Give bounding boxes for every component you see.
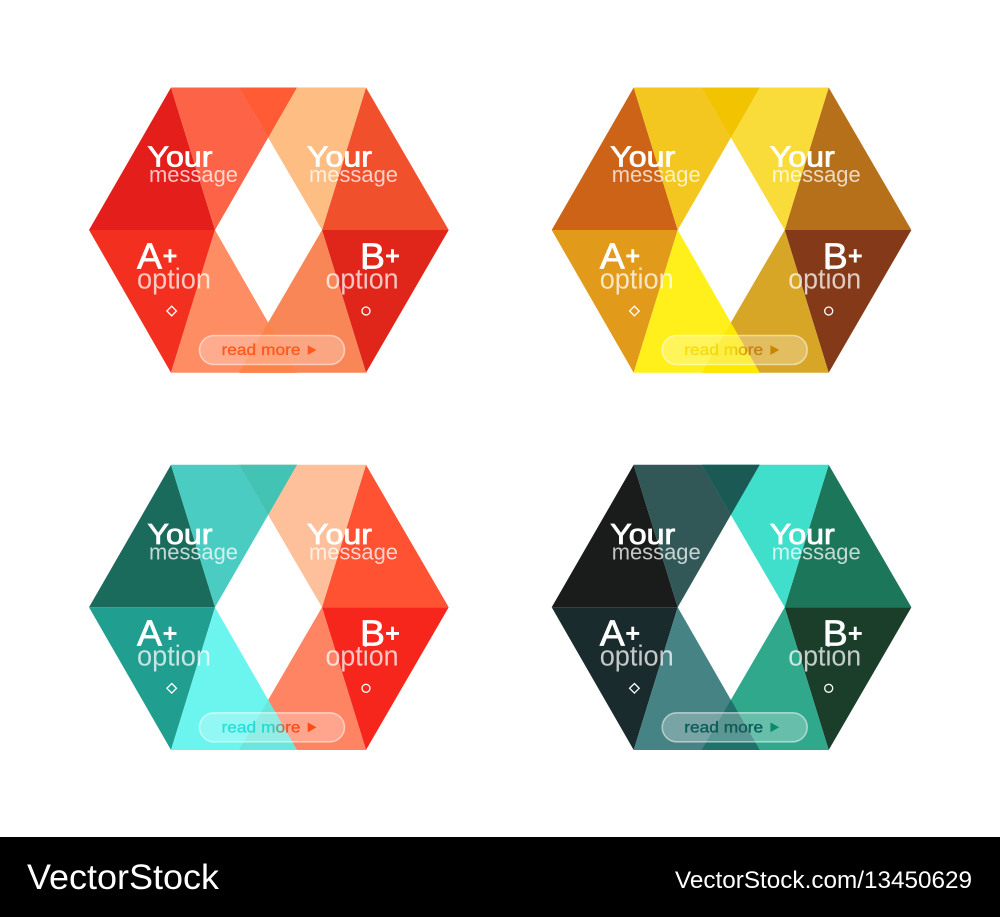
bottom-left band xyxy=(634,230,760,373)
button: read more: read more xyxy=(684,342,763,359)
label: A+ option: + xyxy=(162,240,178,270)
top-right band xyxy=(702,465,829,607)
label: Your message right: message xyxy=(309,162,398,187)
label: Your message left xyxy=(148,142,238,187)
bottom-right triangle xyxy=(322,607,449,750)
panel: dark green hexagon xyxy=(552,465,911,750)
top-left triangle xyxy=(89,465,215,607)
bottom overlap xyxy=(702,700,760,750)
button: read more xyxy=(662,336,807,364)
top overlap xyxy=(239,465,297,515)
label: A+ option: + xyxy=(625,240,640,270)
icon: diamond xyxy=(167,684,176,693)
top-right band xyxy=(702,88,829,230)
top-left band xyxy=(634,465,760,607)
bottom-left triangle xyxy=(89,607,215,750)
label: B+ option xyxy=(326,235,400,295)
top-right triangle xyxy=(785,465,911,607)
label: B+ option: B xyxy=(823,235,848,276)
panel: amber hexagon xyxy=(552,88,911,373)
top-left triangle xyxy=(552,465,678,607)
icon: circle xyxy=(362,307,370,315)
label: Your message right xyxy=(307,142,398,187)
label: A+ option: A xyxy=(137,613,162,654)
label: Your message right xyxy=(770,142,861,187)
top-left band xyxy=(171,88,297,230)
label: B+ option: option xyxy=(788,263,861,295)
label: B+ option: + xyxy=(848,618,863,648)
label: A+ option: A xyxy=(600,613,625,654)
bottom-left band xyxy=(171,230,297,373)
label: Your message right: message xyxy=(309,539,398,564)
bottom-right band xyxy=(239,230,366,373)
bottom-right band xyxy=(702,230,829,373)
label: Your message left xyxy=(148,519,238,564)
bottom-left triangle xyxy=(552,230,678,373)
top-right band xyxy=(239,88,366,230)
top-left triangle xyxy=(89,88,215,230)
label: A+ option: + xyxy=(625,618,640,648)
top-left band xyxy=(171,465,297,607)
label: Your message right xyxy=(307,519,398,564)
label: B+ option: option xyxy=(788,641,861,673)
icon: diamond xyxy=(630,306,639,316)
label: Your message right: message xyxy=(772,162,861,187)
bottom-right triangle xyxy=(785,230,911,373)
label: A+ option xyxy=(137,235,211,295)
label: Your message left: message xyxy=(612,539,701,564)
label: B+ option xyxy=(788,235,863,295)
label: A+ option: option xyxy=(600,641,674,673)
label: Your message right: Your xyxy=(307,142,372,174)
panel: red hexagon xyxy=(89,88,449,373)
bottom overlap xyxy=(239,323,297,373)
footer bar xyxy=(0,837,1000,917)
label: A+ option: option xyxy=(137,641,211,673)
label: B+ option: + xyxy=(385,240,400,270)
label: B+ option: + xyxy=(385,618,400,648)
bottom overlap xyxy=(702,323,760,373)
button: read more xyxy=(200,713,344,742)
bottom-right band xyxy=(702,607,829,750)
button: read more: read more xyxy=(222,719,301,736)
label: A+ option xyxy=(137,613,211,673)
button: read more xyxy=(662,713,807,742)
label: B+ option: B xyxy=(360,613,385,654)
top-left triangle xyxy=(552,88,678,230)
label: Your message left: Your xyxy=(610,142,676,174)
label: Your message left: message xyxy=(612,162,701,187)
label: Your message left xyxy=(610,142,701,187)
bottom-right band xyxy=(239,607,366,750)
label: A+ option xyxy=(600,613,674,673)
label: Your message right: Your xyxy=(307,519,372,551)
top overlap xyxy=(702,465,760,515)
label: Your message left: message xyxy=(149,162,238,187)
label: B+ option xyxy=(788,613,863,673)
label: Your message left: Your xyxy=(148,519,213,551)
icon: circle xyxy=(825,684,833,692)
footer image id: VectorStock.com/13450629 xyxy=(675,867,972,894)
bottom-left band xyxy=(634,607,760,750)
label: B+ option: B xyxy=(360,235,385,276)
label: Your message left xyxy=(610,519,701,564)
button: read more: read more xyxy=(684,719,763,736)
bottom-left triangle xyxy=(89,230,215,373)
label: Your message right: message xyxy=(772,539,861,564)
top-right triangle xyxy=(785,88,911,230)
label: B+ option: option xyxy=(326,641,398,673)
label: A+ option: A xyxy=(137,235,162,276)
label: B+ option: option xyxy=(326,263,398,295)
label: Your message left: message xyxy=(149,539,238,564)
icon: diamond xyxy=(167,306,176,316)
top-right triangle xyxy=(322,465,449,607)
label: Your message right: Your xyxy=(770,519,835,551)
top-left band xyxy=(634,88,760,230)
icon: diamond xyxy=(630,684,639,693)
label: Your message right xyxy=(770,519,861,564)
label: A+ option: A xyxy=(600,235,625,276)
label: B+ option xyxy=(326,613,400,673)
bottom-left band xyxy=(171,607,297,750)
panel: teal and red hexagon xyxy=(89,465,449,750)
label: A+ option: + xyxy=(162,618,178,648)
icon: circle xyxy=(362,684,370,692)
label: B+ option: B xyxy=(823,613,848,654)
footer logo text: VectorStock xyxy=(27,858,220,897)
top overlap xyxy=(702,88,760,138)
label: B+ option: + xyxy=(848,240,863,270)
icon: circle xyxy=(825,307,833,315)
bottom overlap xyxy=(239,700,297,750)
button: read more: read more xyxy=(222,342,301,359)
label: A+ option: option xyxy=(600,263,674,295)
bottom-left triangle xyxy=(552,607,678,750)
button: read more xyxy=(200,336,344,364)
label: Your message left: Your xyxy=(610,519,676,551)
bottom-right triangle xyxy=(322,230,449,373)
top-right triangle xyxy=(322,88,449,230)
top overlap xyxy=(239,88,297,138)
label: Your message right: Your xyxy=(770,142,835,174)
label: A+ option xyxy=(600,235,674,295)
top-right band xyxy=(239,465,366,607)
label: Your message left: Your xyxy=(148,142,213,174)
bottom-right triangle xyxy=(785,607,911,750)
label: A+ option: option xyxy=(137,263,211,295)
